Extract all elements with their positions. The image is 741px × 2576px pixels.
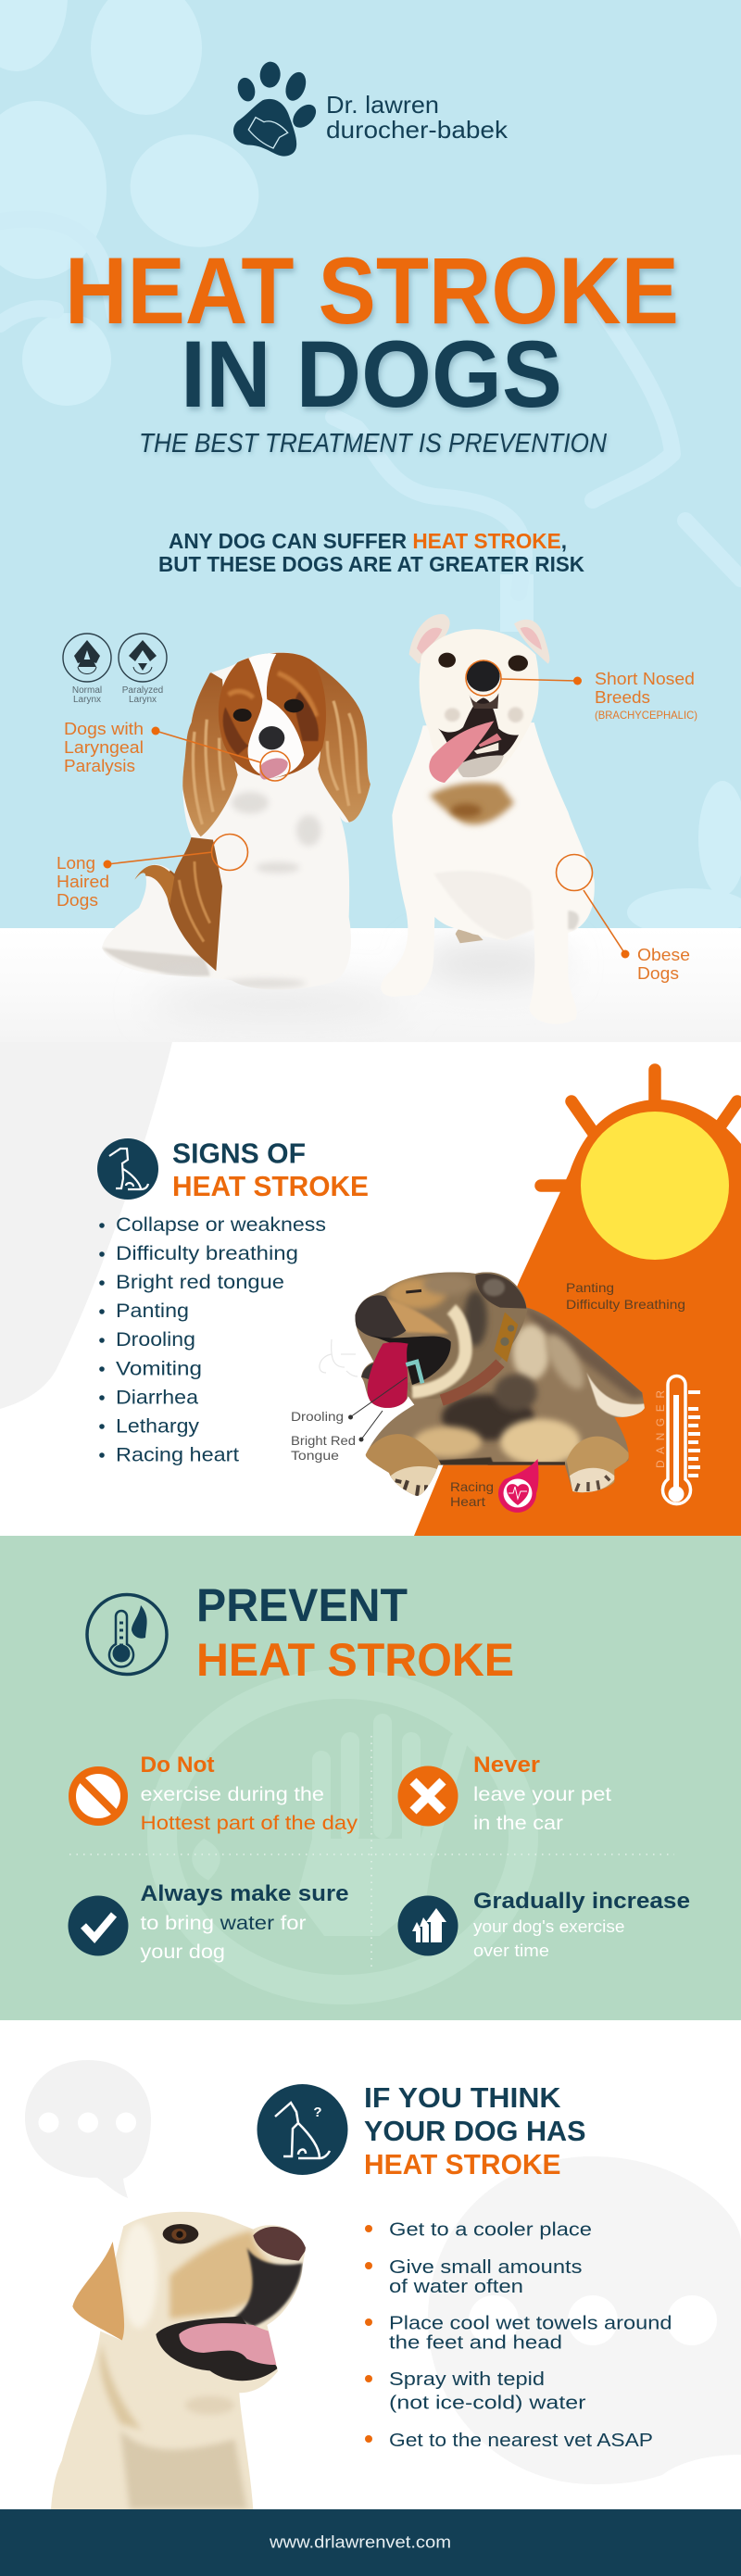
list: signs: Diarrhea — [116, 1388, 198, 1408]
list: what to do: Get to a cooler place — [389, 2219, 592, 2240]
callout: racing heart — [450, 1459, 538, 1513]
callout: laryngeal paralysis: Laryngeal — [64, 738, 144, 757]
risk heading — [158, 529, 584, 576]
list: signs — [99, 1214, 326, 1465]
heading: signs of — [172, 1137, 369, 1202]
callout: drooling — [291, 1377, 407, 1424]
heading: if you think: HEAT STROKE — [364, 2148, 561, 2180]
ears — [409, 614, 450, 664]
mouth — [156, 2317, 278, 2381]
heading: prevent: HEAT STROKE — [196, 1634, 514, 1686]
callout: long haired dogs: Long — [57, 854, 95, 873]
logo text — [326, 91, 509, 144]
photo: white bulldog — [381, 614, 595, 1024]
background: large speech bubble — [428, 2156, 741, 2484]
list: what to do: Get to the nearest vet ASAP — [389, 2431, 653, 2451]
logo text: durocher-babek — [326, 116, 509, 144]
item: always make sure: your dog — [141, 1941, 225, 1963]
chest stain — [429, 783, 514, 824]
callout: laryngeal paralysis — [64, 720, 290, 781]
closed eye — [406, 1290, 421, 1292]
list: signs: Vomiting — [116, 1358, 202, 1380]
back shading — [521, 1306, 648, 1399]
icon: dog with question mark — [257, 2084, 348, 2175]
item: never: Never — [473, 1753, 540, 1778]
risk heading: ANY DOG CAN SUFFER HEAT STROKE, — [169, 529, 567, 553]
body — [381, 723, 595, 1024]
brown back — [167, 836, 222, 971]
labels: panting: Panting — [566, 1280, 614, 1295]
list: what to do — [365, 2219, 672, 2451]
item: gradually increase — [398, 1889, 690, 1960]
list: signs: Panting — [116, 1301, 189, 1322]
background: small speech bubble — [25, 2060, 151, 2198]
item: never: in the car — [473, 1813, 563, 1834]
title — [65, 238, 679, 427]
item: never: leave your pet — [473, 1784, 611, 1805]
shoulder fur — [512, 1325, 549, 1380]
mouth — [370, 1336, 451, 1385]
eye shadows — [223, 692, 319, 755]
list: what to do: Give small amounts — [389, 2257, 582, 2278]
icon: paralyzed larynx: Larynx — [129, 695, 157, 705]
rear fur — [102, 948, 210, 975]
white blaze — [248, 653, 304, 778]
heading: signs of: HEAT STROKE — [172, 1170, 369, 1202]
panel: hero background — [0, 0, 741, 1042]
footer — [0, 2509, 741, 2576]
callout: laryngeal paralysis: Paralysis — [64, 757, 135, 775]
tongue — [429, 721, 494, 783]
icon: normal larynx — [63, 634, 111, 705]
callout: obese dogs — [556, 854, 690, 983]
callout: long haired dogs: Dogs — [57, 891, 98, 910]
cheek — [412, 1309, 466, 1392]
mouth — [438, 697, 519, 766]
head — [219, 653, 326, 778]
dotted dividers — [69, 1736, 674, 1971]
list: signs: Drooling — [116, 1329, 195, 1351]
icon: thermometer — [654, 1376, 700, 1504]
item: do not: Do Not — [141, 1753, 215, 1778]
hind end — [586, 1373, 647, 1417]
chest shading — [160, 792, 321, 988]
floor shadows — [148, 943, 565, 1013]
photo: labrador — [51, 2212, 306, 2509]
icons: larynx diagrams — [63, 634, 167, 705]
icon: normal larynx: Larynx — [73, 695, 101, 705]
icon: paw logo — [233, 61, 320, 157]
callout: bright red tongue — [291, 1411, 383, 1463]
icon: no heat — [87, 1595, 167, 1675]
list: signs: Bright red tongue — [116, 1272, 284, 1293]
left leg — [364, 1434, 442, 1499]
labels: panting — [566, 1280, 685, 1312]
hind paw — [456, 927, 484, 943]
right leg — [567, 1437, 630, 1492]
callout: racing heart: Heart — [450, 1494, 485, 1509]
list: what to do: the feet and head — [389, 2332, 562, 2353]
belly — [500, 1419, 581, 1465]
heading: if you think: IF YOU THINK — [364, 2081, 561, 2114]
list: signs: Collapse or weakness — [116, 1214, 326, 1236]
neck shading — [100, 2344, 247, 2509]
item: do not — [72, 1753, 358, 1834]
item: always make sure: to bring water for — [141, 1913, 307, 1934]
panel: signs of heat stroke — [0, 1042, 741, 1536]
heading: if you think — [364, 2081, 585, 2180]
callout: long haired dogs — [57, 834, 248, 910]
list: what to do: Spray with tepid — [389, 2369, 545, 2390]
item: gradually increase: your dog's exercise — [473, 1917, 624, 1936]
footer: www.drlawrenvet.com — [269, 2532, 451, 2551]
icon: dog in circle — [97, 1138, 158, 1200]
tongue — [368, 1342, 408, 1410]
item: never — [398, 1753, 611, 1834]
callout: short nosed breeds: Breeds — [595, 688, 650, 707]
sun and orange hill — [414, 1070, 741, 1536]
photo: cavalier spaniel — [102, 652, 370, 989]
heading: if you think: YOUR DOG HAS — [364, 2115, 585, 2147]
callout: short nosed breeds: Short Nosed — [595, 670, 695, 688]
icon: paralyzed larynx: Paralyzed — [122, 685, 163, 696]
callout: racing heart: Racing — [450, 1479, 494, 1494]
list: what to do: Place cool wet towels around — [389, 2314, 672, 2334]
muzzle shading — [445, 707, 523, 723]
icon: thermometer: DANGER — [654, 1390, 667, 1468]
tongue — [179, 2323, 276, 2365]
title: IN DOGS — [181, 321, 562, 427]
logo text: Dr. lawren — [326, 91, 439, 119]
dark muzzle edge — [234, 2248, 303, 2327]
callout: short nosed breeds — [466, 660, 697, 722]
callout: long haired dogs: Haired — [57, 873, 109, 891]
ear — [475, 1274, 526, 1309]
list: signs: Lethargy — [116, 1415, 200, 1438]
icon: paralyzed larynx — [119, 634, 167, 705]
item: do not: Hottest part of the day — [141, 1813, 358, 1834]
ear — [72, 2242, 124, 2341]
title: HEAT STROKE — [65, 238, 679, 344]
heading: prevent: PREVENT — [196, 1579, 408, 1631]
head — [420, 629, 539, 777]
left ear — [181, 670, 238, 836]
head — [373, 1272, 528, 1399]
labels: panting: Difficulty Breathing — [566, 1297, 685, 1312]
forehead highlight — [120, 2223, 157, 2328]
list: signs: Difficulty breathing — [116, 1243, 298, 1264]
item: always make sure: Always make sure — [141, 1881, 348, 1906]
photo: panting bulldog — [355, 1272, 645, 1496]
heading: signs of: SIGNS OF — [172, 1137, 306, 1169]
callout: bright red tongue: Tongue — [291, 1448, 339, 1463]
callout: short nosed breeds: (BRACHYCEPHALIC) — [595, 709, 697, 722]
item: do not: exercise during the — [141, 1784, 324, 1805]
collars — [442, 1363, 500, 1401]
callout: laryngeal paralysis: Dogs with — [64, 720, 144, 738]
list: what to do: of water often — [389, 2277, 523, 2297]
icon: normal larynx: Normal — [72, 685, 102, 696]
logo — [233, 61, 509, 157]
risk heading: BUT THESE DOGS ARE AT GREATER RISK — [158, 552, 584, 576]
muzzle — [355, 1295, 406, 1338]
list: signs: Racing heart — [116, 1445, 239, 1465]
muzzle — [170, 2230, 284, 2318]
list: what to do: (not ice-cold) water — [389, 2394, 586, 2414]
callout: obese dogs: Obese — [637, 946, 690, 964]
panel: prevent heat stroke — [0, 1536, 741, 2020]
panel: if you think your dog has heat stroke — [25, 2060, 741, 2509]
callout: drooling: Drooling — [291, 1409, 344, 1424]
callout: obese dogs: Dogs — [637, 964, 679, 983]
right ear — [308, 658, 372, 824]
item: always make sure — [69, 1881, 348, 1963]
item: gradually increase: Gradually increase — [473, 1889, 690, 1914]
icon: breath puffs — [320, 1339, 358, 1376]
dark chest — [442, 1394, 534, 1440]
watermark: hand in circle — [162, 1684, 523, 1990]
subtitle: THE BEST TREATMENT IS PREVENTION — [139, 429, 607, 459]
icon: dog with question mark: ? — [313, 2105, 322, 2120]
eye — [163, 2224, 198, 2243]
item: gradually increase: over time — [473, 1941, 549, 1960]
callouts: risk factors — [57, 660, 697, 983]
heading: prevent — [196, 1579, 514, 1686]
callout: bright red tongue: Bright Red — [291, 1433, 356, 1448]
